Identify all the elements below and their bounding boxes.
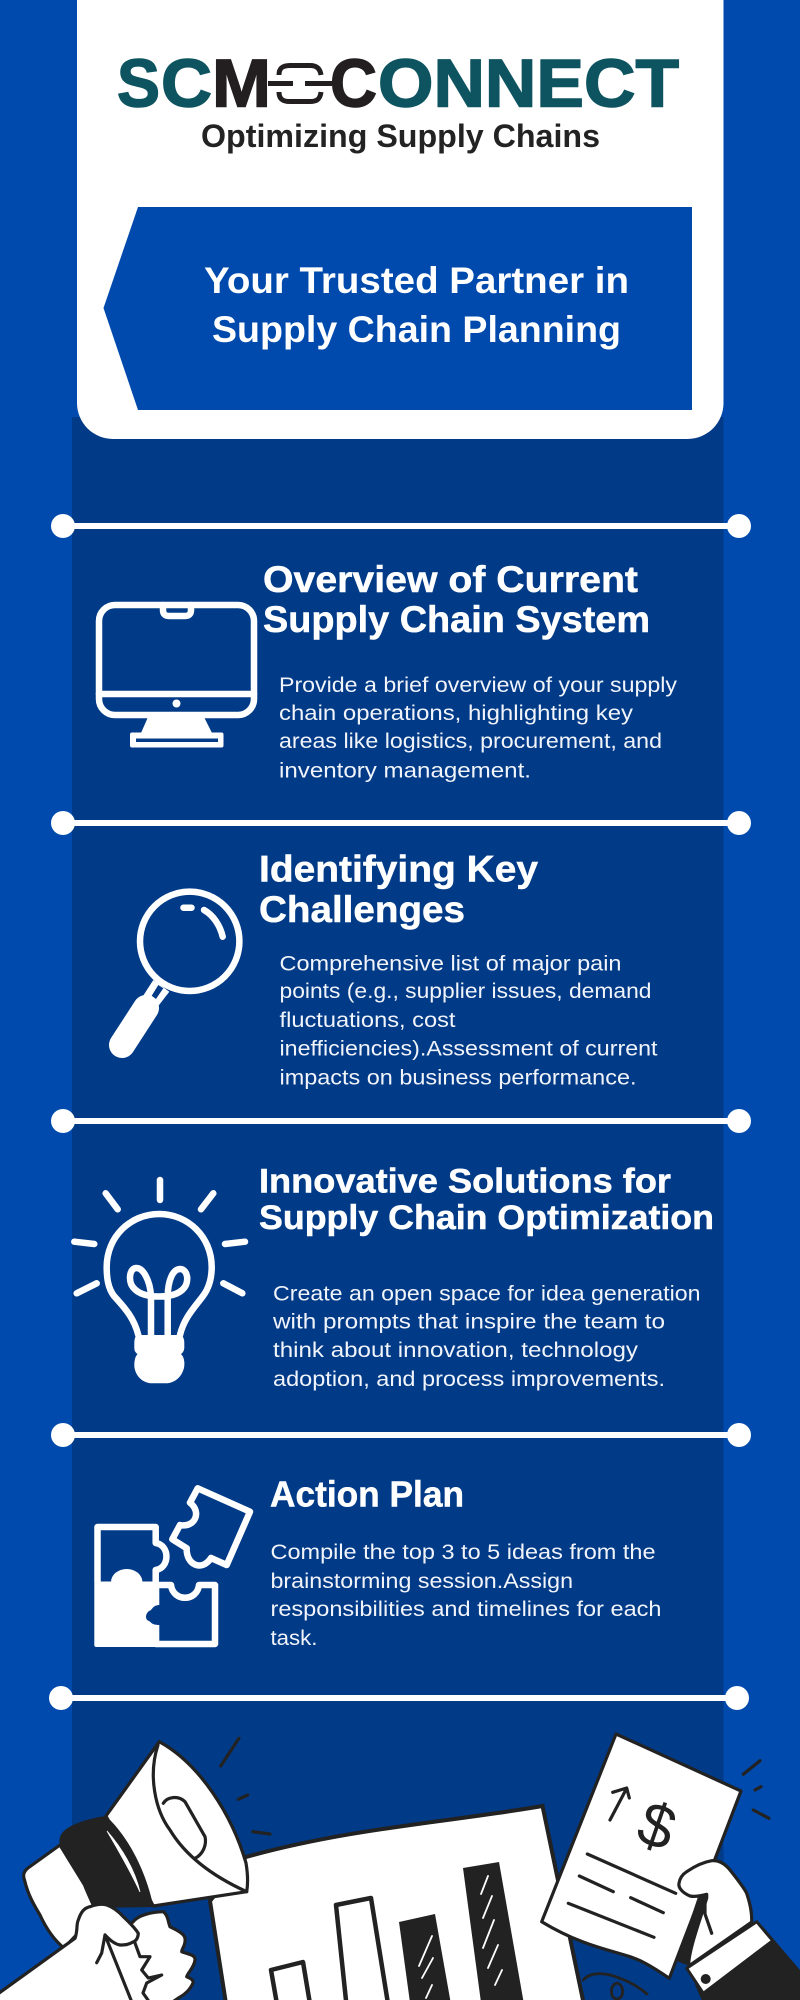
illustration: action marks (221, 1738, 769, 1999)
text: solutions body (272, 1282, 700, 1391)
sleeve (695, 1927, 800, 2000)
heading: challenges (259, 848, 538, 930)
paper shadow wedge (677, 1894, 710, 1965)
illustration: right hand and sleeve (677, 1861, 800, 2000)
divider 1 (51, 514, 751, 538)
logo: SCM Connect (117, 46, 679, 122)
heading: solutions: Supply Chain Optimization (259, 1199, 714, 1237)
divider 5 (49, 1686, 749, 1710)
illustration: report paper (542, 1734, 741, 1978)
heading: overview: Overview of Current (263, 559, 638, 600)
text: overview body (279, 674, 678, 782)
heading: challenges: Identifying Key (259, 848, 538, 890)
banner text: Your Trusted Partner in (204, 260, 629, 301)
icon: magnifying glass (122, 892, 239, 1045)
tagline: Optimizing Supply Chains (201, 118, 600, 154)
section: challenges (122, 848, 658, 1090)
text: overview body: chain operations, highlighting key (279, 702, 634, 725)
heading: challenges: Challenges (259, 889, 465, 930)
text: solutions body: adoption, and process improvements. (273, 1368, 665, 1391)
text: challenges body (280, 952, 658, 1090)
banner text (204, 260, 629, 350)
text: overview body: areas like logistics, procurement, and (279, 730, 662, 753)
heading: action plan: Action Plan (270, 1474, 464, 1514)
text: action plan body: task. (270, 1627, 318, 1650)
section: solutions (74, 1162, 714, 1391)
icon: monitor (99, 605, 254, 748)
text: challenges body: fluctuations, cost (280, 1009, 456, 1032)
hand detail (97, 1935, 162, 2000)
text: action plan body (270, 1541, 662, 1650)
megaphone band (59, 1816, 154, 1908)
text: challenges body: points (e.g., supplier issues, demand (280, 980, 652, 1003)
text: action plan body: responsibilities and timelines for each (270, 1598, 662, 1621)
icon: growth arrow (610, 1788, 629, 1820)
logo: SCM Connect: C (330, 46, 377, 122)
text: action plan body: Compile the top 3 to 5 ideas from the (270, 1541, 656, 1564)
divider 3 (51, 1109, 751, 1133)
hand holding megaphone (0, 1904, 138, 2000)
cuff button (701, 1974, 711, 1984)
divider 2 (51, 811, 751, 835)
band highlight (107, 1831, 140, 1892)
bars (271, 1862, 525, 2000)
divider 4 (51, 1423, 751, 1447)
dollar sign: $ (629, 1788, 684, 1865)
fingers (105, 1912, 195, 2000)
text: action plan body: brainstorming session.Assign (270, 1570, 573, 1593)
heading: overview: Supply Chain System (263, 599, 650, 640)
header card (77, 0, 724, 439)
dark central panel (72, 417, 724, 2000)
megaphone rim (153, 1745, 247, 1892)
text: challenges body: Comprehensive list of major pain (280, 952, 622, 976)
text: overview body: Provide a brief overview of your supply (279, 674, 678, 697)
banner text: Supply Chain Planning (212, 309, 621, 350)
text: challenges body: impacts on business performance. (280, 1066, 636, 1090)
illustration: megaphone and hand (0, 1742, 248, 2000)
logo: SCM Connect: C (161, 46, 212, 122)
text: overview body: inventory management. (279, 760, 531, 782)
heading: solutions: Innovative Solutions for (259, 1162, 671, 1200)
thumb detail (705, 1902, 712, 1933)
icon: puzzle (94, 1488, 250, 1647)
section: overview (99, 559, 678, 782)
text: solutions body: with prompts that inspire the team to (272, 1310, 665, 1334)
logo: SCM Connect: M (212, 46, 271, 122)
icon: light bulb (74, 1180, 245, 1383)
text: solutions body: Create an open space for idea generation (273, 1282, 700, 1306)
text: solutions body: think about innovation, technology (273, 1339, 639, 1362)
text: challenges body: inefficiencies).Assessment of current (280, 1038, 658, 1060)
megaphone cone (106, 1742, 248, 1906)
section: action plan (94, 1474, 662, 1650)
hand (679, 1861, 752, 1966)
megaphone back (24, 1845, 100, 1948)
heading: solutions (259, 1162, 714, 1237)
banner arrow (104, 207, 692, 410)
cuff (687, 1922, 773, 1993)
report text lines (568, 1854, 676, 1937)
logo: SCM Connect: S (117, 46, 160, 122)
logo: SCM Connect: ONNECT (378, 46, 679, 122)
illustration: bar chart paper (210, 1806, 585, 2000)
heading: overview (263, 559, 650, 640)
